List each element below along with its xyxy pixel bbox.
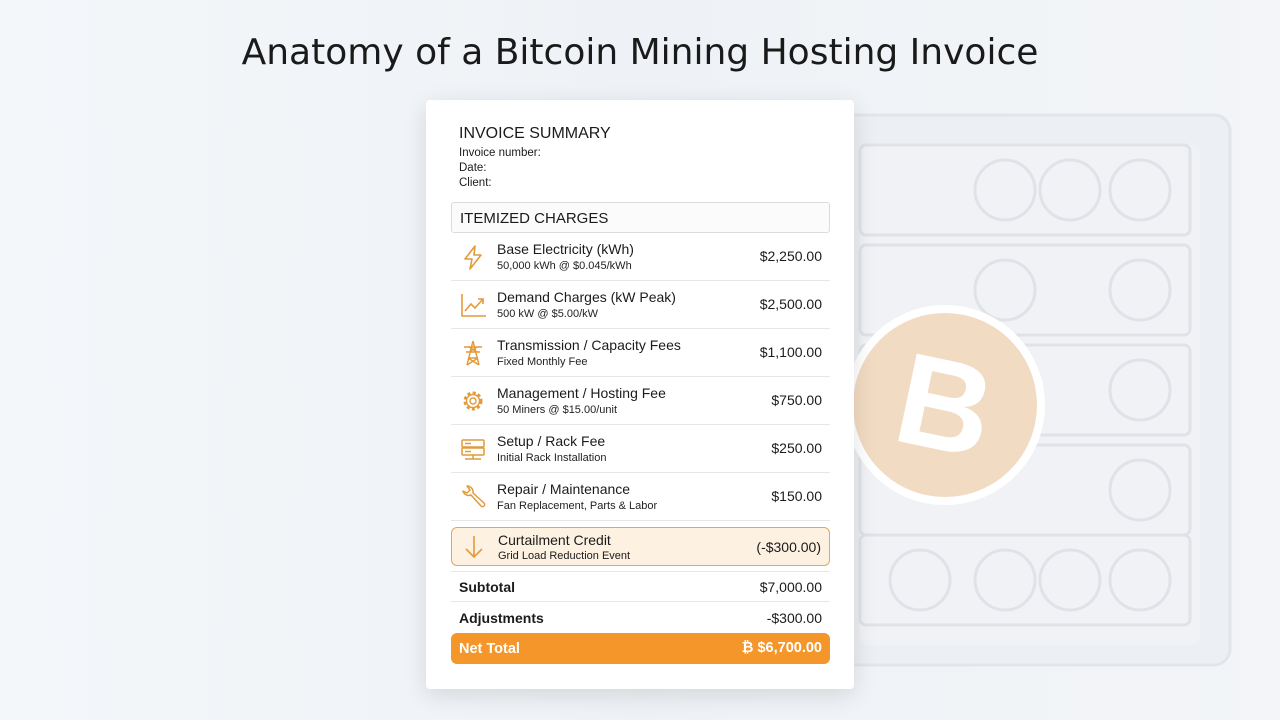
net total bar — [451, 633, 830, 664]
curtailment credit row: Curtailment Credit — [498, 532, 611, 548]
row: demand charges — [451, 281, 830, 329]
title: Anatomy of a Bitcoin Mining Hosting Invoice — [242, 32, 1038, 73]
row: setup — [451, 425, 830, 473]
row: repair: $150.00 — [771, 488, 822, 504]
adjustments: -$300.00 — [767, 610, 822, 626]
row: setup: $250.00 — [771, 440, 822, 456]
row: transmission — [451, 329, 830, 377]
background miner illustration: B — [884, 324, 1006, 486]
curtailment credit row — [451, 527, 830, 566]
itemized charges header — [451, 202, 830, 233]
icon: pylon — [464, 340, 482, 366]
row: management: $750.00 — [771, 392, 822, 408]
icon: chart — [461, 294, 486, 317]
row: base electricity: $2,250.00 — [760, 248, 822, 264]
curtailment credit row: (-$300.00) — [756, 539, 821, 555]
invoice meta fields — [459, 147, 541, 189]
row: demand charges: 500 kW @ $5.00/kW — [497, 308, 598, 320]
row: base electricity — [451, 233, 830, 281]
itemized charges header: ITEMIZED CHARGES — [460, 210, 608, 227]
row: repair: Repair / Maintenance — [497, 481, 630, 497]
icon: lightning — [464, 245, 482, 270]
row: management: Management / Hosting Fee — [497, 385, 666, 401]
curtailment credit row: Grid Load Reduction Event — [498, 550, 630, 562]
row: transmission: $1,100.00 — [760, 344, 822, 360]
row: repair — [451, 473, 830, 521]
net total bar: Net Total — [459, 641, 520, 657]
icon: down arrow — [466, 536, 482, 558]
invoice meta fields: Invoice number: — [459, 147, 541, 159]
row: demand charges: Demand Charges (kW Peak) — [497, 289, 676, 305]
row: management — [451, 377, 830, 425]
icon: wrench — [462, 485, 486, 508]
invoice meta fields: Date: — [459, 162, 486, 174]
row: setup: Initial Rack Installation — [497, 452, 606, 464]
net total bar: ₿ $6,700.00 — [742, 640, 822, 656]
adjustments: Adjustments — [459, 610, 544, 626]
row: management: 50 Miners @ $15.00/unit — [497, 404, 617, 416]
invoice meta fields: Client: — [459, 177, 492, 189]
row: setup: Setup / Rack Fee — [497, 433, 605, 449]
invoice card — [426, 100, 854, 689]
subtotal: $7,000.00 — [760, 579, 822, 595]
icon: gear — [464, 392, 482, 410]
row: base electricity: Base Electricity (kWh) — [497, 241, 634, 257]
row: demand charges: $2,500.00 — [760, 296, 822, 312]
background miner illustration — [854, 114, 1232, 666]
adjustments — [459, 610, 822, 626]
invoice summary heading: INVOICE SUMMARY — [459, 125, 611, 142]
icon: server — [461, 439, 485, 460]
subtotal — [451, 571, 830, 602]
row: transmission: Transmission / Capacity Fees — [497, 337, 681, 353]
row: repair: Fan Replacement, Parts & Labor — [497, 500, 657, 512]
row: base electricity: 50,000 kWh @ $0.045/kWh — [497, 260, 632, 272]
subtotal: Subtotal — [459, 579, 515, 595]
row: transmission: Fixed Monthly Fee — [497, 356, 587, 368]
